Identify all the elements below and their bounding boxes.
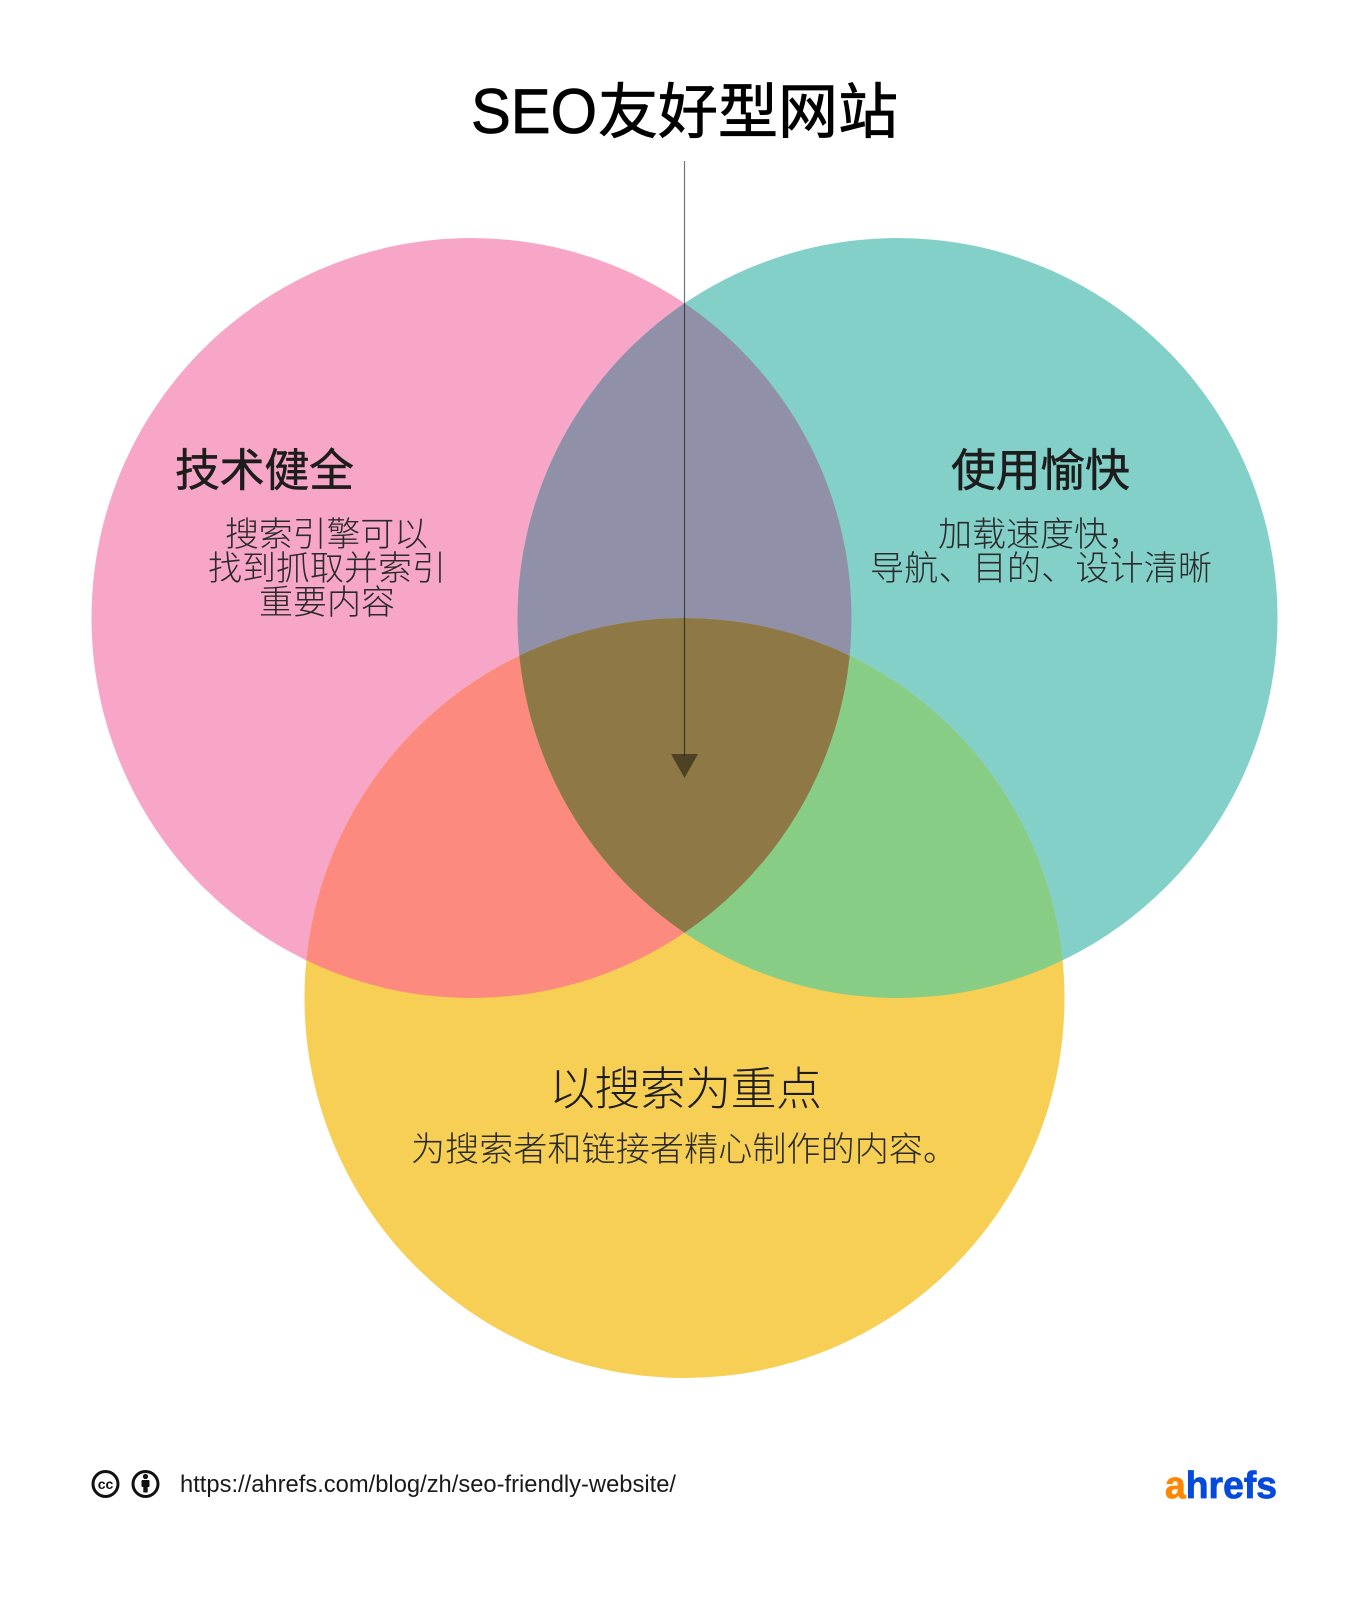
description: 导航、目的、设计清晰 xyxy=(870,550,1212,588)
overlap: pink and teal xyxy=(518,304,852,656)
circle: pleasant to use xyxy=(518,238,1278,998)
description xyxy=(870,516,1212,588)
title: 友好型网站 xyxy=(598,79,898,146)
overlap: teal and yellow xyxy=(519,618,1062,998)
description: 搜索引擎可以 xyxy=(225,516,428,554)
source url: https://ahrefs.com/blog/zh/seo-friendly-website/ xyxy=(180,1471,676,1498)
circle: technically sound xyxy=(92,238,852,998)
venn diagram xyxy=(92,238,1278,1378)
description: 加载速度快， xyxy=(938,516,1142,554)
overlap: pink and yellow xyxy=(306,618,849,998)
icon: creative commons xyxy=(93,1472,118,1496)
heading: 以搜索为重点 xyxy=(549,1063,822,1115)
title xyxy=(471,77,898,147)
footer xyxy=(93,1465,1277,1507)
description: 重要内容 xyxy=(259,584,395,622)
ahrefs logo: ahrefs xyxy=(1165,1465,1277,1507)
overlap: center of all three xyxy=(519,618,850,932)
panel text: pleasant to use xyxy=(870,445,1212,588)
heading: 技术健全 xyxy=(175,445,354,496)
title: SEO xyxy=(471,77,597,147)
description: 为搜索者和链接者精心制作的内容。 xyxy=(411,1131,957,1169)
description xyxy=(208,516,446,622)
panel text: search focused xyxy=(411,1063,957,1169)
arrow from title to center xyxy=(671,161,698,778)
panel text: technically sound xyxy=(175,445,446,622)
icon: attribution xyxy=(133,1472,158,1496)
circle: search focused xyxy=(304,618,1064,1378)
icon: creative commons: cc xyxy=(98,1476,113,1492)
heading: 使用愉快 xyxy=(951,445,1130,496)
description: 找到抓取并索引 xyxy=(208,550,446,588)
